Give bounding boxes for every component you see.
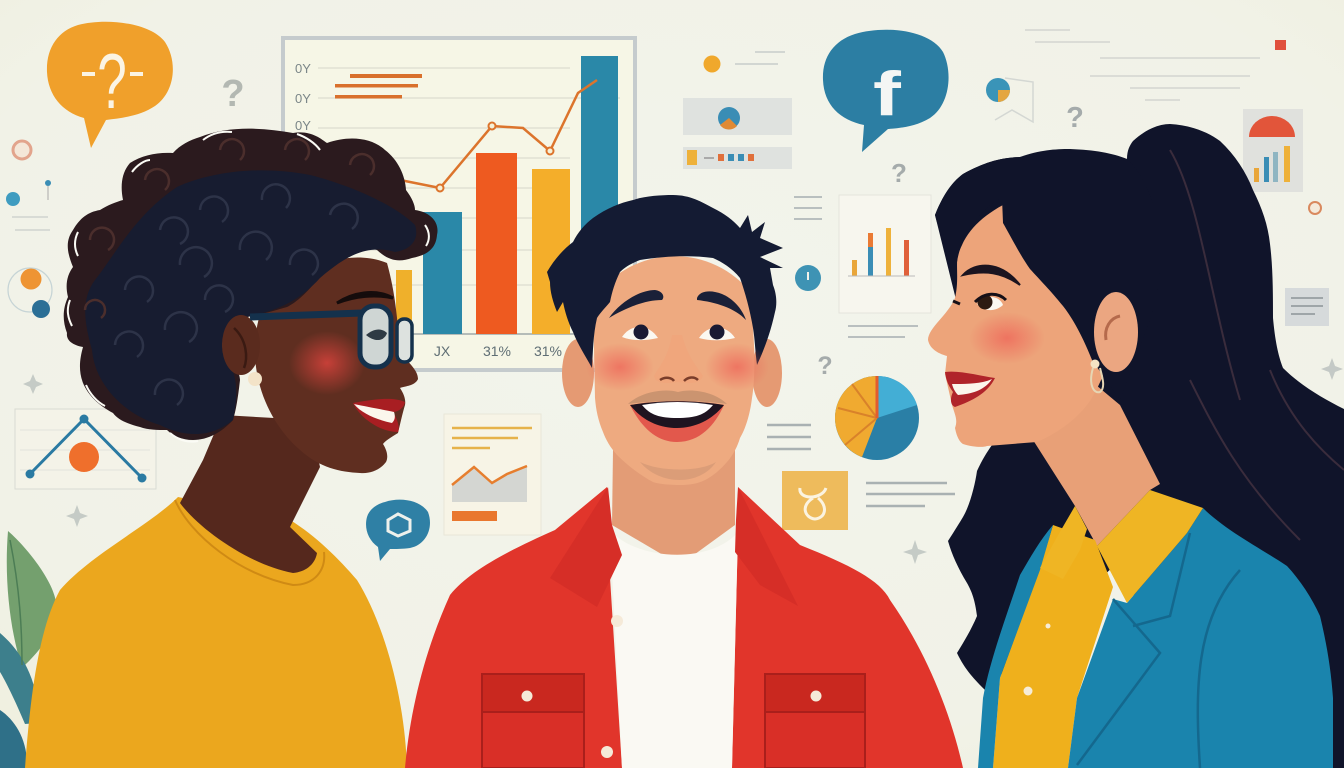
right woman back hair: [935, 124, 1344, 768]
right woman brow: [963, 266, 1020, 285]
mini bar chart card: [839, 195, 931, 313]
icon: grey question mark: ?: [221, 73, 245, 115]
chart axis labels: 0Y: [295, 118, 311, 133]
icon: small red flag: [1275, 40, 1286, 50]
center man shirt: [405, 487, 963, 768]
icon: question marks right: ?: [891, 158, 907, 188]
icon: question marks right: [817, 102, 1084, 380]
chart axis labels: 0Y: [295, 61, 311, 76]
right woman face: [928, 205, 1110, 447]
right woman collar: [1040, 490, 1203, 603]
left woman hair crescent highlights: [68, 132, 429, 442]
right woman blush: [969, 312, 1045, 364]
card: dome with bars: [1243, 109, 1303, 192]
icon: small markers mid: [23, 374, 927, 564]
icon: small ring right: [1309, 202, 1321, 214]
icon: facebook speech bubble: [823, 30, 949, 152]
icon: blue clock dot: [795, 265, 821, 291]
left line chart card: [15, 409, 156, 489]
right woman yellow shirt: [993, 525, 1113, 768]
right woman blazer: [978, 508, 1333, 768]
person: left woman: [25, 129, 438, 768]
chart bars: [396, 56, 618, 334]
center man hair: [547, 195, 783, 368]
left woman shirt: [25, 497, 407, 768]
icon: blue chat bubble: [366, 500, 430, 561]
icon: yellow stethoscope tile: [782, 471, 848, 530]
icon: facebook speech bubble: f: [873, 59, 901, 128]
center man neck: [612, 450, 735, 565]
left woman mouth: [353, 399, 405, 432]
right woman shirt buttons: [1024, 624, 1050, 696]
right woman front hair: [935, 152, 1160, 400]
center man nose: [654, 335, 703, 383]
icon: sparkle right: [1321, 358, 1343, 380]
person: center man: [405, 195, 963, 768]
left woman brow: [337, 293, 393, 303]
center man shirt pockets: [482, 674, 865, 768]
right woman neck: [1033, 380, 1160, 546]
center man tee: [610, 530, 738, 768]
right woman hair strands: [1060, 150, 1344, 540]
left woman face: [255, 258, 418, 473]
chart trend line: [400, 80, 597, 192]
left woman hair: [64, 129, 438, 442]
small dashboard cards: [683, 52, 792, 169]
left side icons: [6, 141, 52, 318]
icon: globe with ribbon: [986, 78, 1033, 122]
center man face: [593, 256, 754, 485]
right woman eye: [953, 294, 1006, 310]
center man stubble: [640, 462, 716, 480]
card: right grey list: [1285, 288, 1329, 326]
chart bar labels: 31%: [483, 343, 511, 359]
center man eyes: [622, 324, 735, 340]
chart bar labels: 31%: [534, 343, 562, 359]
left woman neck: [180, 415, 320, 573]
right woman mouth: [945, 372, 995, 407]
center man collar: [550, 487, 798, 607]
chart bar labels: JX: [434, 343, 451, 359]
left woman blush: [289, 331, 365, 395]
person: right woman: [928, 124, 1344, 768]
center man blush: [586, 343, 769, 391]
left woman upper curls: [85, 139, 374, 318]
decorative list lines beside pie: [767, 425, 955, 506]
chart axis labels: [295, 61, 311, 133]
center man buttons: [522, 615, 822, 758]
icon: question marks right: ?: [817, 352, 833, 380]
icon: orange question speech bubble: ?: [97, 39, 127, 126]
right woman lapel: [1077, 533, 1240, 768]
plant leaves: [0, 531, 56, 768]
icon: question marks right: ?: [1066, 102, 1084, 134]
chart legend lines: [335, 74, 422, 98]
chart bar labels: [434, 343, 562, 359]
top right text lines: [1025, 30, 1260, 100]
left woman collar line: [175, 500, 324, 585]
right woman ear and earring: [1090, 292, 1138, 392]
bar chart panel: [283, 38, 635, 370]
left woman ear and earring: [222, 315, 262, 386]
decorative list lines: [794, 197, 918, 337]
left woman hair curls: [115, 184, 358, 405]
line chart card: [444, 414, 541, 535]
left woman glasses: [250, 306, 412, 367]
pie chart: [835, 376, 919, 460]
center man mouth: [630, 401, 724, 442]
chart axis labels: 0Y: [295, 91, 311, 106]
left woman eye: [366, 329, 387, 340]
icon: orange question speech bubble: [47, 22, 173, 148]
center man moustache shadow: [628, 390, 727, 404]
center man brows: [609, 290, 746, 320]
center man ears: [562, 339, 782, 407]
